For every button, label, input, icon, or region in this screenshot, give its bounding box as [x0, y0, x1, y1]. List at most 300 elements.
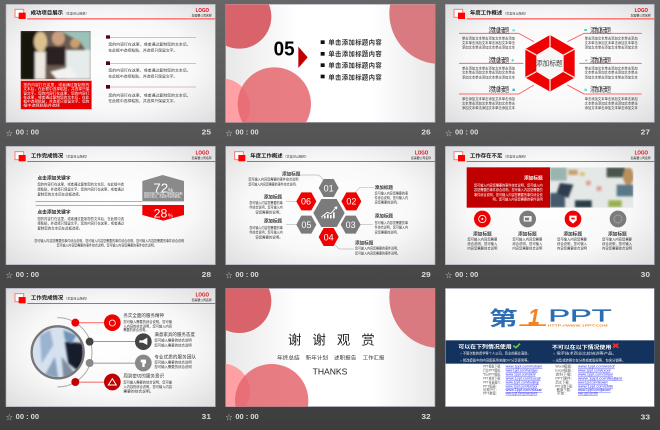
slide 29: six hexagons [226, 146, 435, 280]
bullet list [321, 37, 382, 81]
label top [248, 170, 301, 186]
red panel: 事件综合说明，您可输入内容您需要的事件综合说 [474, 192, 543, 197]
column 3: 综合说明，您可输入 [557, 241, 587, 246]
link urls right: www.1ppt.com/kejian/ [578, 376, 622, 380]
right item 2: 单击添加文本单击添加文本单击添加 [585, 65, 638, 70]
logo: LOGO [196, 8, 209, 14]
hexagon 02: 02 [346, 197, 356, 207]
point 3: 您可输入需要的综合说明 [154, 364, 192, 369]
link urls right: www.1ppt.com/excel/ [578, 368, 611, 372]
logo: 您需要公司名称 [631, 155, 651, 160]
logo: LOGO [196, 292, 209, 298]
link urls right: www.1ppt.com/word/ [578, 365, 615, 369]
brand logo: 1 [528, 304, 540, 329]
footer time: ☆ [6, 414, 13, 422]
grey 72 percent block: 72 [153, 180, 168, 195]
item 1: 在此框中选择粘贴，并选择只保留文字。 [108, 47, 177, 52]
hexagon 01: 01 [324, 183, 334, 193]
point 4: 周到密切的服务意识 [123, 373, 164, 380]
logo: 您需要公司名称 [411, 155, 431, 160]
left item 1: 添加标题 [488, 26, 510, 35]
hexagon 02 [341, 192, 361, 210]
column 2: 综合说明，您可输入 [512, 241, 543, 246]
bottom caption: 您可输入内容您需要的事件综合说明，您可输入内容您需要的事件综合说明。您可输入内容您需要的事件综合说明 [34, 238, 184, 243]
text block 1: 择粘贴，并选择只保留文字。您的内容打在这里，或者通过 [37, 186, 124, 191]
page number: 33 [641, 412, 650, 421]
right item 1: 添加标题 [590, 25, 611, 34]
icon circle 2 [519, 211, 536, 227]
bullet list: 单击添加标题内容 [328, 72, 382, 81]
photo: desk from above [550, 167, 634, 208]
label left lower: 容您需要的说明。 [255, 235, 283, 240]
label right lower: 容您需要的说明。 [375, 229, 400, 234]
column 3 [557, 230, 587, 251]
column 4: 您可输入内容您需要 [602, 236, 632, 241]
label bottom: 您可输入内容您需要的事件说明， [355, 246, 400, 251]
hexagon 01 [319, 179, 339, 197]
right item 3: 添加文本单击添加文本单击添加文本 [585, 105, 638, 110]
column 1 [467, 230, 498, 251]
link urls left: www.1ppt.com/powerpoint/ [506, 392, 537, 396]
link list left: PPT教程： [483, 391, 499, 396]
hexagon 03: 03 [346, 220, 356, 230]
point 2: 满意家具的服务态度 [154, 331, 195, 338]
label right lower: 您可输入内容您需要的事 [375, 220, 408, 225]
footer time [226, 270, 259, 280]
hexagon 06: 06 [301, 197, 311, 207]
text block 1 [37, 174, 124, 196]
text block 2: 点击添加关键字 [37, 209, 71, 216]
footer time [445, 270, 478, 280]
item 3 [106, 85, 196, 103]
footer time: 00 : 00 [235, 128, 259, 137]
subtitle: （文案可以随机） [64, 296, 89, 300]
label bottom [355, 239, 400, 255]
hexagon 06 [296, 192, 316, 210]
red panel: 添加标题 [524, 175, 543, 182]
central hexagon [525, 34, 575, 92]
point 2 [86, 331, 195, 350]
label right upper: 您可输入内容您需要的事 [375, 190, 408, 195]
red text box: 您的内容打在这里，或者通过复制您的 [23, 82, 90, 87]
link urls left: www.1ppt.com/hangye/ [506, 368, 538, 372]
link urls right: www.1ppt.com/shiti/ [578, 384, 613, 388]
footer time: 00 : 00 [235, 270, 259, 279]
red text box: 文本后，在此框中选择粘贴，并选择只保 [23, 86, 90, 91]
logo: 您需要公司名称 [631, 12, 651, 17]
link list left [483, 364, 503, 396]
link list right: 资料下载： [555, 371, 575, 376]
link urls right [578, 365, 622, 396]
left item 2: 添加文本单击添加文本单击添加文本 [462, 74, 515, 79]
red text box [21, 81, 92, 109]
icon circle 4 [610, 211, 626, 227]
label right upper: 件综合说明，您可输入内 [375, 195, 408, 200]
footer time [445, 128, 478, 137]
navy band: ○ 修改模板中的内容图表用来做DIY分享使用等。 [460, 357, 531, 362]
column 2: 添加标题 [518, 230, 537, 237]
footer time: 00 : 00 [16, 270, 39, 279]
hexagon 04: 04 [324, 232, 334, 242]
left item 1: 添加文本单击添加文本单击添加文本 [462, 45, 515, 50]
slide 33: 1PPT promo [445, 288, 654, 421]
footer time: 00 : 00 [16, 412, 39, 421]
slide 32: thank you [225, 288, 436, 420]
bullet list: 单击添加标题内容 [328, 37, 382, 46]
slide 26: section divider [225, 4, 436, 136]
label right upper: 容您需要的说明。 [375, 200, 400, 205]
red text box: 框中选择粘贴并选择 [23, 102, 60, 107]
column 2: 内容您需要综合说明 [512, 246, 543, 251]
hexagon 05 [296, 216, 316, 234]
link list right: PPT试卷下载： [555, 383, 575, 388]
red text box: 在这里，或者通过复制您的文本后，在此 [23, 94, 90, 99]
text block 2: 您的内容打在这里，或者通过复制您的文本后，在此框中选 [37, 216, 124, 221]
right item 1: 文本单击添加文本单击添加文本单击 [585, 40, 638, 45]
link list right: Word模板： [555, 364, 575, 369]
keywords: 述职报告 [334, 355, 356, 362]
left item 2: 单击添加文本单击添加文本单击添加 [462, 65, 515, 70]
label left lower: 件综合说明，您可输入内 [249, 230, 283, 235]
bullet list: 单击添加标题内容 [328, 61, 382, 70]
slide 30: work shortcomings [445, 146, 654, 280]
link urls right: www.1ppt.com/fanwen/ [578, 380, 608, 384]
divider lines [36, 201, 142, 206]
header rule [27, 160, 215, 163]
point 1: 务实全面的服务精神 [123, 312, 164, 319]
link list left: PPT素材下载： [483, 375, 503, 380]
logo [631, 150, 651, 160]
brand logo: HTTP://WWW.1PPT.COM [548, 324, 609, 328]
bottom caption: 您可输入内容您需要的事件综合说明，您可输入内容您需要的事件综合说明。 [57, 243, 157, 248]
thank-you heading: 谢谢观赏 [288, 332, 375, 347]
link list right: Excel模板： [555, 367, 575, 372]
point 2: 您可输入需要的综合说明 [154, 338, 192, 343]
column 3: 添加标题 [563, 230, 582, 237]
page number: 27 [641, 128, 650, 137]
link list left: 节日PPT模板： [483, 371, 503, 376]
grey 72 percent block: 您的内容打在这里，或者通过复制 [144, 191, 183, 195]
point 2: 您可输入需要的综合说明 [154, 342, 192, 347]
label left upper [249, 194, 283, 215]
column 1: 内容您需要综合说明 [467, 246, 498, 251]
header icon [454, 152, 465, 161]
subtitle: （文案可以随机） [283, 154, 308, 158]
red panel: 明。您可输入内容您需要的事件说明 [493, 197, 543, 202]
decorative circles [226, 4, 435, 122]
footer time: ☆ [6, 272, 13, 280]
red 28 percent block: % [168, 214, 173, 220]
icon circle 3 [565, 211, 581, 227]
label right upper [375, 184, 408, 205]
column 1: 您可输入内容您需要 [467, 236, 498, 241]
footer time: ☆ [445, 129, 452, 137]
right item 3 [584, 85, 638, 110]
point 1: 需要的综合说明。 [123, 327, 148, 332]
item 3: 在此框中选择粘贴，并选择只保留文字。 [108, 98, 177, 103]
navy band: ○ 不限次数的看学等个人公司、商业的展业演讲。 [460, 351, 531, 356]
red panel: 容您需要的事件综合说明。您可输入内容您需要的 [474, 187, 543, 192]
point 1 [71, 312, 172, 332]
text block 2: 择粘贴，并选择只保留文字。您的内容打在这里，或者通过 [37, 221, 124, 226]
header rule [467, 18, 654, 20]
column 2 [512, 230, 543, 251]
slide 31: circular photo with four points [6, 288, 215, 422]
red panel [467, 167, 550, 208]
outer arc [57, 318, 92, 387]
page number: 28 [202, 270, 212, 279]
navy band [446, 340, 654, 364]
header icon [15, 9, 26, 19]
label left upper: 您可输入内容您需要的事 [249, 200, 283, 205]
right item 2: 文本单击添加文本单击添加文本单击 [585, 70, 638, 75]
central hexagon: 添加标题 [536, 59, 563, 68]
point 4 [71, 373, 172, 393]
slide title: 年度工作概述 [470, 9, 502, 16]
footer time: 00 : 00 [455, 270, 478, 279]
grey 72 percent block [142, 175, 184, 201]
left item 3: 文本单击添加文本单击添加文本单击 [462, 100, 515, 105]
item 2: 在此框中选择粘贴，并选择只保留文字。 [108, 73, 177, 78]
left item 2: 文本单击添加文本单击添加文本单击 [462, 70, 515, 75]
footer time [6, 128, 39, 137]
keywords [277, 355, 384, 362]
footer time: ☆ [445, 272, 452, 280]
subtitle: （文案可以随机） [503, 12, 528, 16]
footer time: 00 : 00 [16, 128, 39, 137]
logo [192, 8, 212, 17]
link urls right: www.1ppt.com/ziti/ [578, 392, 598, 396]
logo: LOGO [635, 8, 648, 14]
right item 2: 添加文本单击添加文本单击添加文本 [585, 74, 638, 79]
left item 3 [462, 85, 515, 110]
grey 72 percent block: % [168, 188, 174, 194]
navy band: ○ 出售或转移它在分类或者版权等，包含分销等。 [553, 357, 625, 362]
circular photo of buildings [32, 326, 84, 378]
left item 3: 添加标题 [488, 85, 510, 94]
logo: 您需要公司名称 [192, 155, 212, 160]
text block 1: 复制您的文本后在此框选择。 [37, 191, 82, 196]
footer time: 00 : 00 [235, 412, 259, 421]
arrow [298, 47, 308, 68]
footer time [226, 128, 259, 137]
slide 27: annual work overview hexagon [445, 4, 654, 137]
keywords: 年终总结 [277, 355, 300, 362]
point 1: 入内容的综合说明，您可输入内容 [123, 323, 172, 328]
column 4: 内容您需要综合说明 [602, 246, 632, 251]
left item 1: 文本单击添加文本单击添加文本单击 [462, 40, 515, 45]
header rule [27, 18, 215, 20]
page number: 26 [421, 128, 431, 137]
header icon [454, 9, 465, 19]
header icon [15, 152, 26, 161]
right item 3: 文本单击添加文本单击添加文本单击 [585, 100, 638, 105]
left item 1 [462, 26, 515, 50]
label left upper: 添加标题 [264, 194, 282, 201]
logo [411, 150, 431, 160]
logo: LOGO [635, 150, 648, 156]
footer time: 00 : 00 [455, 128, 478, 137]
right item 1: 添加文本单击添加文本单击添加文本 [585, 45, 638, 50]
link urls left: www.1ppt.com/moban/ [506, 365, 542, 369]
link list right: 教案下载： [557, 387, 573, 392]
label top: 添加标题 [282, 170, 301, 177]
label bottom: 您可输入内容您需要的事件说明。 [355, 250, 400, 255]
right item 1: 单击添加文本单击添加文本单击添加 [585, 36, 638, 41]
bullet list: 单击添加标题内容 [328, 49, 382, 58]
page number: 29 [421, 270, 431, 279]
slide title: 工作完成情况 [31, 294, 63, 301]
column 4 [602, 230, 632, 251]
link list right [555, 364, 575, 396]
page number: 31 [202, 412, 212, 421]
text block 1: 点击添加关键字 [37, 174, 71, 181]
column 4: 添加标题 [608, 230, 627, 237]
link list left: PPT背景图片： [483, 379, 503, 384]
slide title: 成功项目展示 [31, 10, 63, 17]
label right lower: 添加标题 [375, 212, 393, 219]
link urls left: www.1ppt.com/tubiao/ [506, 384, 537, 388]
text block 2 [37, 209, 124, 231]
left item 1: 单击添加文本单击添加文本单击添加 [462, 36, 515, 41]
label top: 您可输入内容您需要的事件综合说明。 [248, 181, 298, 186]
navy band: 可以在下列情况使用 [458, 342, 512, 350]
red 28 percent block: 28 [154, 206, 168, 220]
label left lower [249, 218, 283, 240]
item 1 [106, 35, 196, 52]
logo: LOGO [196, 150, 209, 156]
link urls left: www.1ppt.com/sucai/ [506, 376, 541, 380]
item 2 [106, 61, 196, 78]
label left upper: 件综合说明，您可输入内 [249, 205, 283, 210]
right item 3: 单击添加文本单击添加文本单击添加 [585, 96, 638, 101]
link list left: PPT模板下载： [483, 364, 503, 369]
text block 2: 复制您的文本后在此框选择。 [37, 226, 82, 231]
footer time: ☆ [226, 272, 233, 280]
link urls right: www.1ppt.com/jiaoan/ [578, 388, 611, 392]
header rule [27, 302, 215, 305]
link list left: 行业PPT模板： [483, 367, 503, 372]
page number: 30 [641, 270, 650, 279]
point 3: 您可输入需要的综合说明 [154, 360, 192, 365]
right item 2: 添加标题 [590, 55, 611, 64]
point 4: 入内容的综合说明，您可输入内容 [123, 384, 172, 389]
grey 72 percent block: 您的文本后，在此框中选择粘贴。 [144, 194, 182, 198]
header rule [467, 160, 654, 163]
logo [631, 8, 651, 17]
point 4: 您可输入需要的综合说明，您可输 [123, 380, 172, 385]
navy band: 不可以在以下情况使用 [552, 343, 611, 351]
keywords: 工作汇报 [363, 355, 384, 362]
label right upper: 添加标题 [375, 184, 393, 191]
page number: 25 [202, 128, 212, 137]
right item 2 [585, 55, 638, 79]
slide 25: achievement display [6, 4, 215, 137]
right item 1 [584, 25, 638, 50]
logo [192, 292, 212, 302]
item 1: 您的内容打在这里，或者通过复制您的文本后， [108, 41, 191, 46]
left item 2: 添加标题 [488, 55, 510, 64]
logo [192, 150, 212, 160]
label left upper: 容您需要的说明。 [255, 210, 283, 215]
slide 28: work completion percentages [6, 146, 215, 280]
slide title: 工作存在不足 [470, 152, 502, 159]
subtitle: （文案可以随机） [64, 12, 89, 16]
red panel: 您可输入内容您需要的事件综合说明，您可输入内 [474, 182, 543, 187]
text block 1: 您的内容打在这里，或者通过复制您的文本后，在此框中选 [37, 182, 124, 187]
label left lower: 添加标题 [264, 218, 282, 225]
link urls left [506, 365, 542, 396]
footer time [6, 270, 39, 280]
link urls left: www.1ppt.com/xiazai/ [506, 388, 542, 392]
header rule [247, 160, 435, 163]
thanks word: THANKS [313, 366, 348, 376]
logo: LOGO [415, 150, 429, 156]
header icon [15, 294, 26, 303]
footer time: ☆ [226, 129, 233, 137]
link urls left: www.1ppt.com/jieri/ [506, 372, 536, 376]
label right lower: 件综合说明，您可输入内 [375, 225, 408, 230]
footer time: ☆ [6, 129, 13, 137]
link list right: PPT课件： [555, 375, 575, 380]
footer time: ☆ [226, 414, 233, 422]
right item 3: 添加标题 [590, 85, 611, 94]
photo: team meeting [21, 31, 91, 79]
red text box: 留文字。您的内容打在这里，您的内容打 [23, 90, 90, 95]
subtitle: （文案可以随机） [64, 154, 89, 158]
point 3: 专业优质的服务团队 [154, 353, 196, 360]
column 1: 添加标题 [473, 230, 492, 237]
logo: 您需要公司名称 [192, 297, 212, 302]
center hexagon with chart icon [313, 199, 345, 227]
column 3: 您可输入内容您需要 [557, 236, 587, 241]
header icon [235, 152, 245, 161]
column 2: 您可输入内容您需要 [512, 236, 543, 241]
column 3: 内容您需要综合说明 [557, 246, 587, 251]
slide title: 工作完成情况 [31, 152, 63, 159]
brand logo: 第 [489, 308, 518, 330]
item 3: 您的内容打在这里，或者通过复制您的文本后， [108, 92, 191, 97]
link urls left: www.1ppt.com/beijing/ [506, 380, 539, 384]
left item 2 [462, 55, 515, 79]
link urls right: www.1ppt.com/ziliao/ [578, 372, 613, 376]
connector lines [459, 33, 642, 94]
section number: 05 [274, 39, 295, 61]
connectors [286, 175, 374, 249]
red text box: 框中选择粘贴，并选择只保留文字。您的 [23, 98, 90, 103]
icon circle 1 [474, 211, 491, 227]
page number: 32 [421, 412, 431, 421]
bottom caption [34, 238, 184, 248]
link list right: 范文下载： [555, 379, 572, 384]
label top: 您可输入内容您需要的事件综合说明 [248, 177, 299, 182]
logo: 您需要公司名称 [192, 12, 212, 17]
point 3 [86, 353, 196, 371]
decorative circles [226, 288, 435, 407]
navy band: ○ 需手技术商业比较培训等产品。 [553, 351, 617, 356]
subtitle: （文案可以随机） [503, 154, 528, 158]
column 4: 综合说明，您可输入 [602, 241, 632, 246]
slide title: 年度工作概述 [250, 152, 283, 159]
point 1: 您可输入需要的综合说明，您可输 [123, 319, 172, 324]
brand logo [489, 304, 612, 330]
item 2: 您的内容打在这里，或者通过复制您的文本后， [108, 68, 191, 73]
column 1: 综合说明，您可输入 [467, 241, 498, 246]
footer time [6, 412, 39, 422]
left item 3: 单击添加文本单击添加文本单击添加 [462, 96, 515, 101]
footer time [226, 412, 259, 422]
label right lower [375, 212, 408, 234]
